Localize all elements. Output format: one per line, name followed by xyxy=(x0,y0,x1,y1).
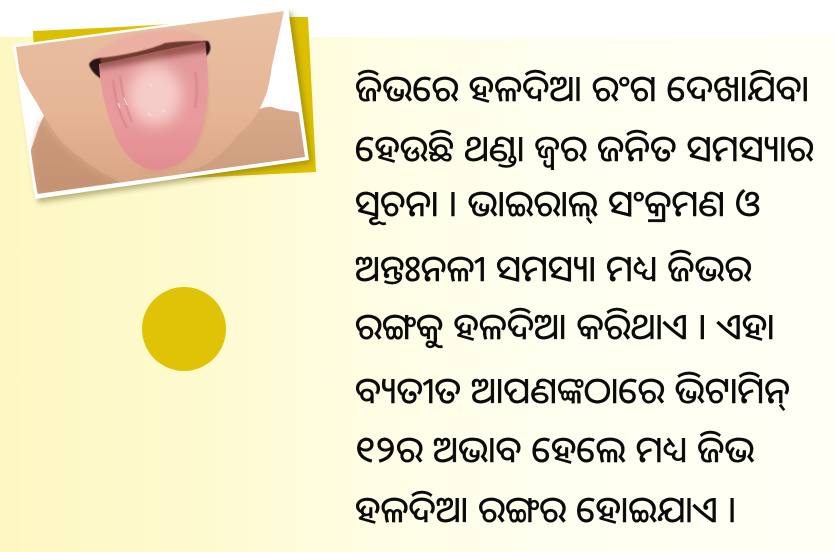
white photo frame xyxy=(13,8,309,199)
text block: Odia body copy: ହଳଦିଆ ରଙ୍ଗର ହୋଇଯାଏ । xyxy=(355,489,737,530)
text block: Odia body copy: ବ୍ୟତୀତ ଆପଣଙ୍କଠାରେ ଭିଟାମିନ୍ xyxy=(355,370,790,411)
mouth corner right xyxy=(203,41,210,58)
face and chin xyxy=(14,11,284,183)
text block: Odia body copy: ସୂଚନା । ଭାଇରାଲ୍ ସଂକ୍ରମଣ ଓ xyxy=(355,183,760,224)
text block: Odia body copy xyxy=(355,68,814,530)
tongue speckles xyxy=(118,84,165,116)
photo: tongue sticking out, tilted on a gold card xyxy=(13,8,316,206)
tongue xyxy=(99,42,208,170)
mouth corner left xyxy=(89,58,103,80)
upper lip xyxy=(92,30,206,59)
mouth interior xyxy=(100,40,206,64)
photo drop shadow xyxy=(18,12,312,203)
dark top of tongue xyxy=(99,42,206,72)
gold card behind photo xyxy=(33,17,316,190)
chin shadow on neck xyxy=(32,118,123,194)
photo content xyxy=(16,11,305,194)
tongue furrows xyxy=(113,72,197,128)
text block: Odia body copy: ୧୨ର ଅଭାବ ହେଲେ ମଧ୍ୟ ଜିଭ xyxy=(355,429,754,470)
neck xyxy=(30,107,306,195)
tongue highlight xyxy=(128,65,182,125)
text block: Odia body copy: ରଙ୍ଗକୁ ହଳଦିଆ କରିଥାଏ । ଏହା xyxy=(355,306,774,347)
text block: Odia body copy: ହେଉଛି ଥଣ୍ଡା ଜ୍ୱର ଜନିତ ସମସ୍ୟାର xyxy=(355,128,814,169)
decorative gold circle xyxy=(142,287,226,371)
lower lip shade xyxy=(186,80,208,158)
text block: Odia body copy: ଜିଭରେ ହଳଦିଆ ରଂଗ ଦେଖାଯିବା xyxy=(355,68,809,109)
text block: Odia body copy: ଅନ୍ତଃନଳୀ ସମସ୍ୟା ମଧ୍ୟ ଜିଭର xyxy=(355,248,752,289)
